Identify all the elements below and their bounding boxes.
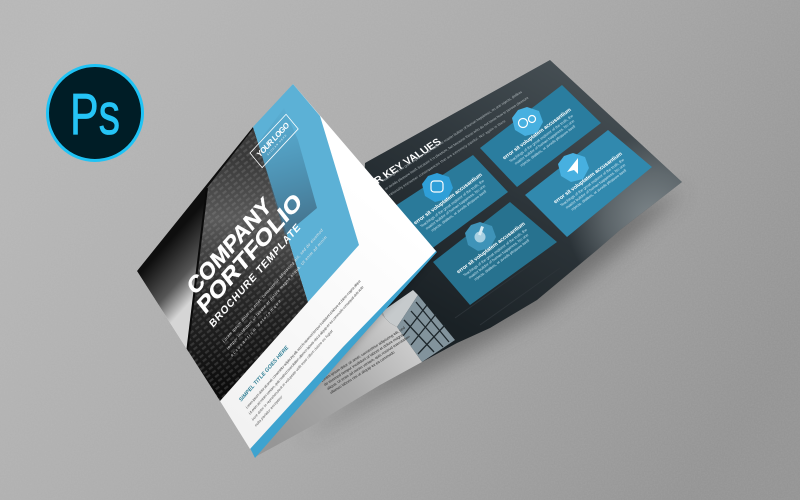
card text: rejects, dislikes, or avoids pleasure itself (570, 168, 628, 212)
cover blue panel (253, 84, 359, 302)
panel: inside gray page (255, 313, 422, 457)
card text: Teachings of the great explorer of the truth, the (509, 114, 574, 163)
text block: white area copy: irure dolor in reprehenderit in voluptate velit esse cillum dolore eu fugiat (251, 329, 333, 422)
text block: intro: Teachings of the great explorer of the truth, the master builder of human happiness, no one rejects, dislikes (381, 90, 523, 183)
heading: our key values: OUR KEY VALUES (359, 137, 444, 195)
card text: master builder of human happiness. No one (514, 119, 575, 166)
card text: rejects, dislikes, or avoids pleasure itself (519, 124, 577, 168)
card text: master builder of human happiness. No one (425, 184, 486, 231)
card text: error sit voluptatem accusantium (502, 107, 573, 161)
card text: rejects, dislikes, or avoids pleasure itself (473, 238, 531, 282)
card text: master builder of human happiness. No one (565, 163, 626, 210)
card text: Teachings of the great explorer of the truth, the (560, 158, 625, 207)
heading: simple title: SIMPEL TITLE GOES HERE (239, 345, 290, 404)
logo box (250, 114, 298, 168)
photo: building reflection in lower page (382, 145, 682, 362)
logo box: YOUR LOGO (255, 120, 291, 159)
icon: Photoshop logo (48, 66, 142, 160)
panel: inside spread dark page (359, 60, 700, 362)
title: portfolio: PORTFOLIO (193, 188, 306, 319)
text block: cover lorem: Lorem ipsum dolor sit amet, consectetur adipiscing elit, sed do eiusmod (222, 227, 324, 344)
icon: gears hexagon (512, 107, 543, 136)
cover blue spine band (250, 249, 437, 458)
icon: Photoshop logo: Ps (70, 82, 120, 147)
title: company: COMPANY (183, 192, 276, 300)
card: value top right (480, 85, 601, 187)
logo box: SLOGAN HERE (267, 133, 288, 156)
card: value lower right (525, 130, 652, 237)
panel: front cover (130, 84, 437, 458)
text block: intro: rationally encounter consequences that are extremely painful. Nor again is there (388, 119, 507, 197)
text block: white area copy: Lorem ipsum dolor sit amet, consectetur adipiscing elit, sed do eiusmod tempor incididunt ut labore et dolore magna aliqua (245, 278, 362, 410)
text block: cover lorem: tempor incididunt ut labore et dolore magna aliqua. Ut enim ad minim (226, 234, 328, 351)
text block: page copy: aliqua. Ut enim ad minim veniam, quis nostrud exercitation (326, 335, 411, 391)
text block: white area copy: nulla pariatur excepteur (254, 394, 284, 428)
text block: page copy: Lorem ipsum dolor sit amet, consectetur adipiscing elit, sed (320, 326, 406, 383)
brochure shadow (300, 190, 684, 440)
text block: intro: or avoids pleasure itself, because it is pleasure, but because those who do not know how to pursue pleasure (384, 96, 529, 191)
text block: white area copy: Ut enim ad minim veniam, quis nostrud exercitation ullamco laboris nisi ut aliquip ex ea commodo consequat duis aute (248, 285, 364, 416)
cover translucent column (258, 108, 317, 235)
cover shadow on spread (300, 245, 436, 400)
card text: error sit voluptatem accusantium (553, 151, 624, 205)
card text: master builder of human happiness. No one (468, 233, 529, 280)
icon: target hexagon (465, 222, 496, 251)
card text: Teachings of the great explorer of the truth, the (420, 179, 485, 228)
subtitle: BROCHURE TEMPLATE (208, 222, 303, 330)
text block: page copy: ullamco laboris nisi ut aliquip ex ea commodo (329, 350, 396, 395)
card text: error sit voluptatem accusantium (413, 172, 484, 226)
card text: error sit voluptatem accusantium (456, 221, 527, 275)
card text: rejects, dislikes, or avoids pleasure itself (430, 189, 488, 233)
card: value upper left (395, 155, 508, 250)
card: value lower left (433, 202, 557, 305)
icon: paper plane hexagon (558, 153, 589, 182)
text block: cover lorem: accusantium doloremque (230, 298, 282, 358)
cover photo: tower (137, 127, 308, 401)
icon: badge hexagon (422, 173, 453, 202)
card text: Teachings of the great explorer of the truth, the (463, 228, 528, 277)
cover white page (137, 84, 436, 449)
text block: page copy: do eiusmod tempor incididunt ut labore et dolore magna (323, 333, 405, 387)
